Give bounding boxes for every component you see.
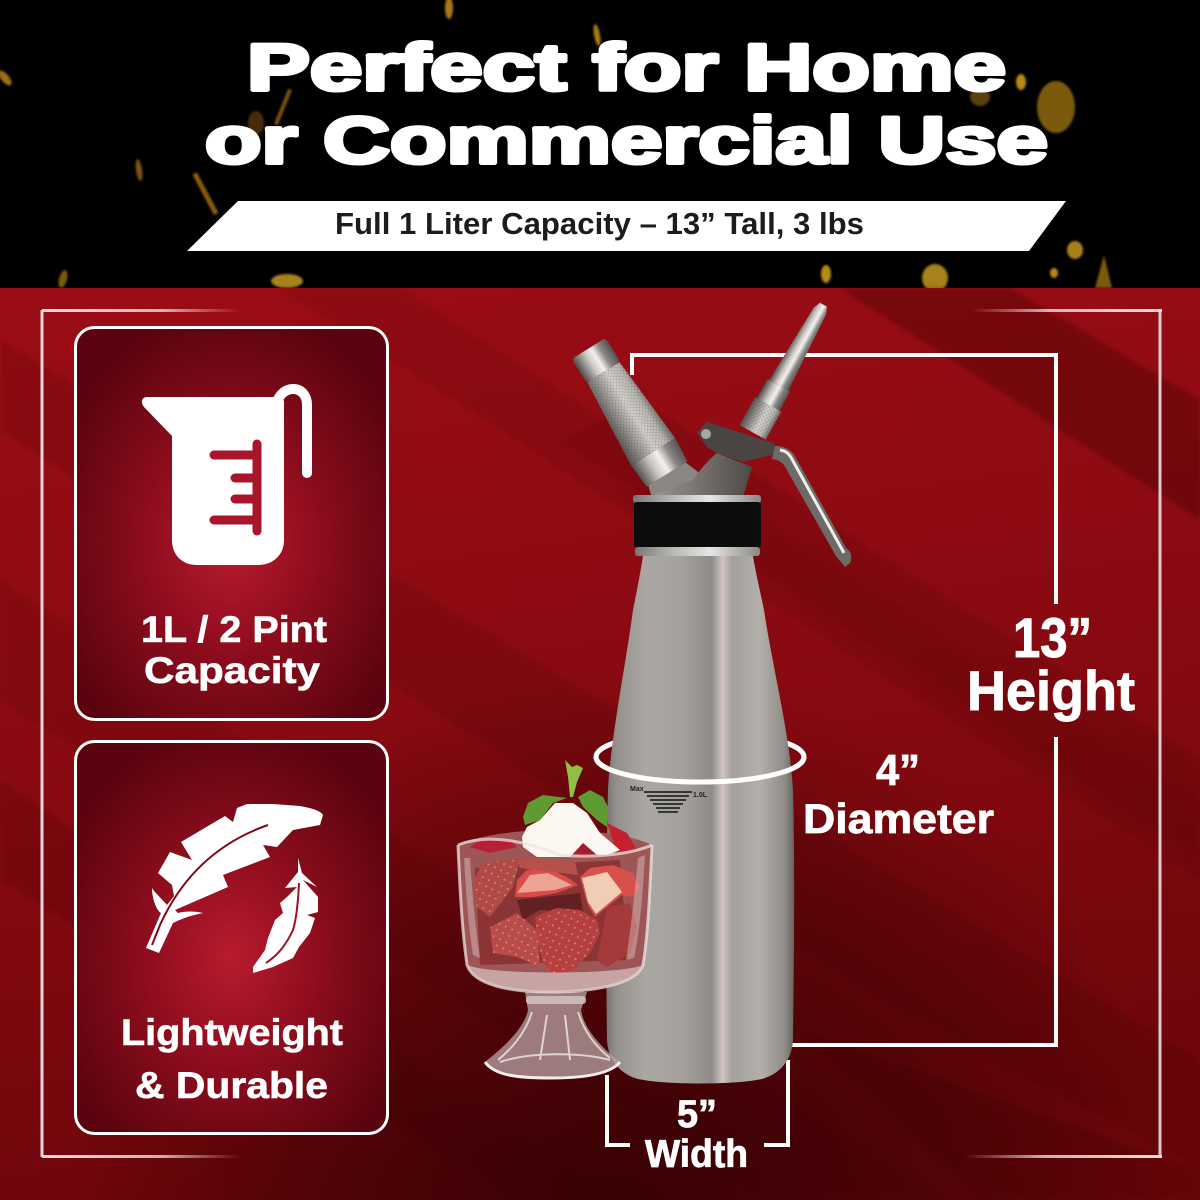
title: or Commercial Use xyxy=(205,103,1048,177)
subtitle banner xyxy=(187,201,1066,251)
height label: 13” xyxy=(1013,606,1092,669)
dimension: width bracket xyxy=(607,1060,788,1145)
height label xyxy=(967,606,1135,722)
outer frame lines xyxy=(42,309,1162,1158)
panel: lightweight card xyxy=(76,742,388,1134)
width label: Width xyxy=(645,1133,748,1176)
panel: capacity card xyxy=(76,328,388,720)
bottle charger holder xyxy=(565,333,704,507)
whipped cream xyxy=(522,803,620,857)
capacity label: Capacity xyxy=(144,650,320,691)
panel: red textured background xyxy=(0,288,1200,1200)
subtitle banner: Full 1 Liter Capacity – 13” Tall, 3 lbs xyxy=(335,206,864,241)
bottle level marks: 1.0L xyxy=(693,792,708,799)
icon: measuring beaker xyxy=(142,389,307,565)
product: cream whipper bottle xyxy=(565,297,851,1084)
dimension: diameter ring back xyxy=(596,732,804,782)
lightweight label: Lightweight xyxy=(121,1012,343,1053)
glass bowl interior xyxy=(458,830,652,992)
bottle lever xyxy=(697,422,780,462)
bottle body xyxy=(606,556,794,1084)
strawberries xyxy=(470,823,640,975)
diameter label: 4” xyxy=(876,746,920,795)
panel: black header background xyxy=(0,0,1200,288)
dessert glass with strawberries xyxy=(458,760,652,1078)
bottle level marks xyxy=(630,786,708,812)
width label xyxy=(645,1093,748,1176)
gold sparks xyxy=(0,0,1112,292)
bottle collar xyxy=(633,495,761,503)
height label: Height xyxy=(967,659,1135,722)
lightweight label xyxy=(121,1012,343,1106)
dimension: diameter ring front xyxy=(596,757,804,782)
mint leaves xyxy=(523,760,608,827)
width label: 5” xyxy=(677,1093,717,1136)
icon: feathers xyxy=(146,804,323,973)
lightweight label: & Durable xyxy=(135,1065,328,1106)
capacity label xyxy=(141,609,327,691)
bottle nozzle xyxy=(740,297,837,440)
title xyxy=(205,30,1048,177)
dimension lines: height bracket xyxy=(632,355,1056,1045)
diameter label: Diameter xyxy=(803,795,994,842)
glass foot xyxy=(485,992,620,1078)
bottle head stem xyxy=(650,453,752,497)
glass bowl highlights xyxy=(458,839,652,992)
diameter label xyxy=(803,746,994,842)
capacity label: 1L / 2 Pint xyxy=(141,609,327,650)
title: Perfect for Home xyxy=(247,30,1006,104)
bottle level marks: Max xyxy=(630,786,644,793)
